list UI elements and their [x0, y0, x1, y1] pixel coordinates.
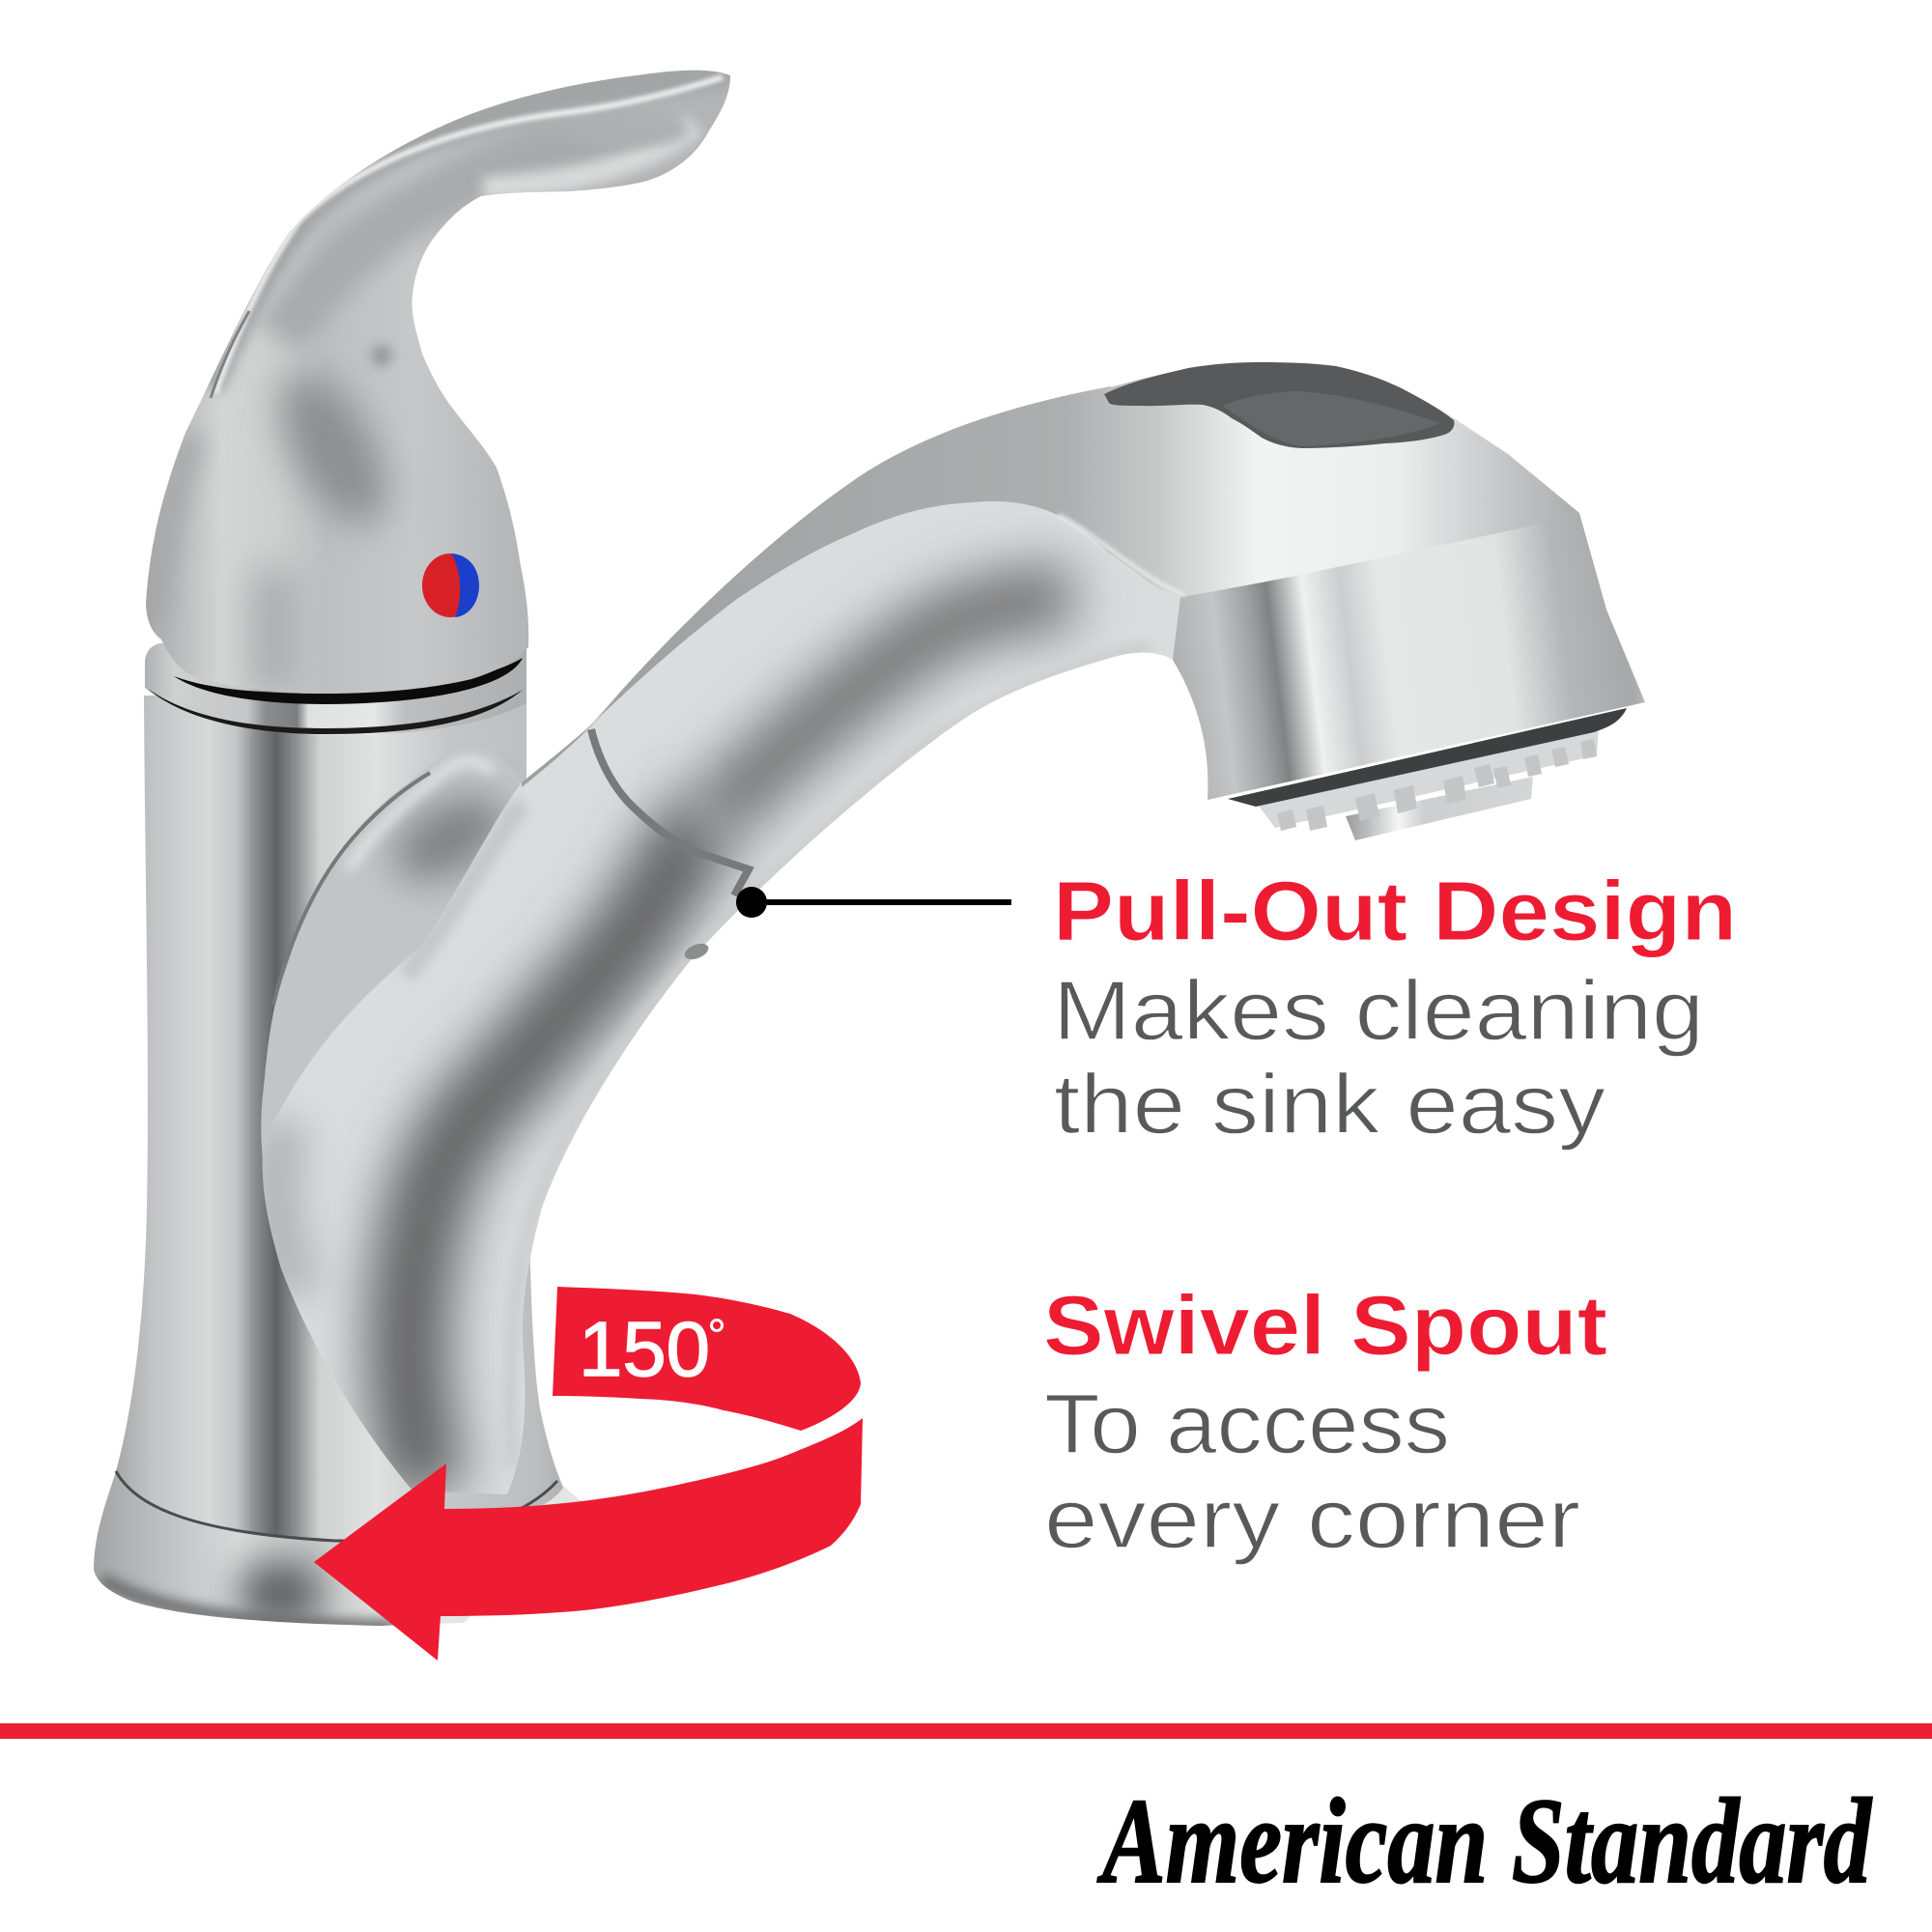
swivel arrow 150 degrees	[314, 1287, 863, 1661]
hub dark blob	[381, 781, 518, 896]
text block: pull-out design	[1053, 865, 1737, 1151]
faucet pillar	[116, 696, 563, 1541]
nozzle ring	[1256, 724, 1599, 828]
leader dot	[736, 887, 767, 918]
lever scoop shade	[630, 121, 692, 152]
faucet base plate	[94, 1471, 583, 1629]
diagonal dark shade	[260, 357, 407, 541]
outer ridge strip	[208, 70, 730, 386]
pull-out seam	[591, 729, 749, 895]
rubber lip	[1228, 708, 1627, 807]
left lower shade	[277, 1121, 299, 1294]
red half	[422, 554, 478, 617]
arrow upper band	[553, 1287, 861, 1431]
red divider	[0, 1723, 1932, 1739]
ridge highlight	[215, 77, 723, 393]
base dark patch	[238, 1559, 323, 1629]
nozzle teeth	[1277, 739, 1597, 831]
heading: Swivel Spout	[1043, 1279, 1607, 1373]
body line 1: To access	[1044, 1378, 1450, 1471]
base plate body	[94, 1471, 583, 1626]
hub highlight	[348, 761, 493, 869]
arrow lower band with head	[314, 1418, 863, 1661]
spout shading	[277, 594, 1150, 1492]
pillar to base seam	[116, 1471, 557, 1541]
leader line	[752, 899, 1011, 905]
crease highlight	[1058, 515, 1184, 595]
upper lever shade	[280, 145, 638, 338]
spout hub	[261, 742, 522, 1159]
hub wedge	[261, 742, 522, 1159]
handle shading	[153, 70, 730, 696]
faucet illustration	[94, 70, 1645, 1629]
nozzle cup	[1346, 777, 1533, 840]
degree symbol	[711, 1320, 723, 1331]
spray nozzle	[1256, 724, 1599, 840]
collar lower black groove	[148, 689, 523, 734]
collar rings	[145, 643, 526, 735]
inner edge soft shade	[510, 647, 1150, 1468]
tooth row right	[1474, 739, 1597, 788]
base lower rim shadow	[101, 1579, 396, 1627]
heading: Pull-Out Design	[1053, 865, 1737, 958]
body line 2: the sink easy	[1054, 1058, 1606, 1151]
small dark spot	[371, 345, 392, 366]
text block: swivel spout	[1043, 1279, 1607, 1566]
left face shade	[153, 435, 193, 618]
left arm shade below seam	[406, 802, 522, 976]
tooth row centre	[1355, 776, 1466, 821]
hub outer dark edge	[273, 773, 430, 1005]
handle lever	[146, 70, 730, 696]
tapered top strip before head	[522, 386, 1111, 787]
handle body	[146, 71, 730, 694]
head lower tube	[1173, 513, 1645, 800]
blue half	[451, 554, 479, 617]
collar upper black groove	[174, 658, 523, 704]
head upper shell	[1101, 362, 1579, 597]
arrow label: 150	[579, 1306, 710, 1392]
tooth row left	[1277, 806, 1327, 831]
collar band	[145, 643, 526, 735]
button inner panel	[1222, 391, 1439, 446]
hot and cold indicator	[422, 554, 479, 617]
spray button	[1104, 362, 1454, 448]
upper dark band	[709, 594, 1072, 820]
lower dark band	[408, 820, 709, 1492]
body line 1: Makes cleaning	[1053, 964, 1704, 1058]
small hole	[682, 941, 711, 962]
lower centre soft shade	[253, 570, 296, 696]
body line 2: every corner	[1044, 1472, 1580, 1566]
callout leader line: pull-out design	[736, 887, 1011, 918]
lever underside light	[483, 126, 696, 188]
ridge dark line	[211, 311, 249, 398]
spray head	[1058, 362, 1645, 840]
spout body	[263, 386, 1198, 1494]
pull-out spout	[263, 386, 1198, 1494]
